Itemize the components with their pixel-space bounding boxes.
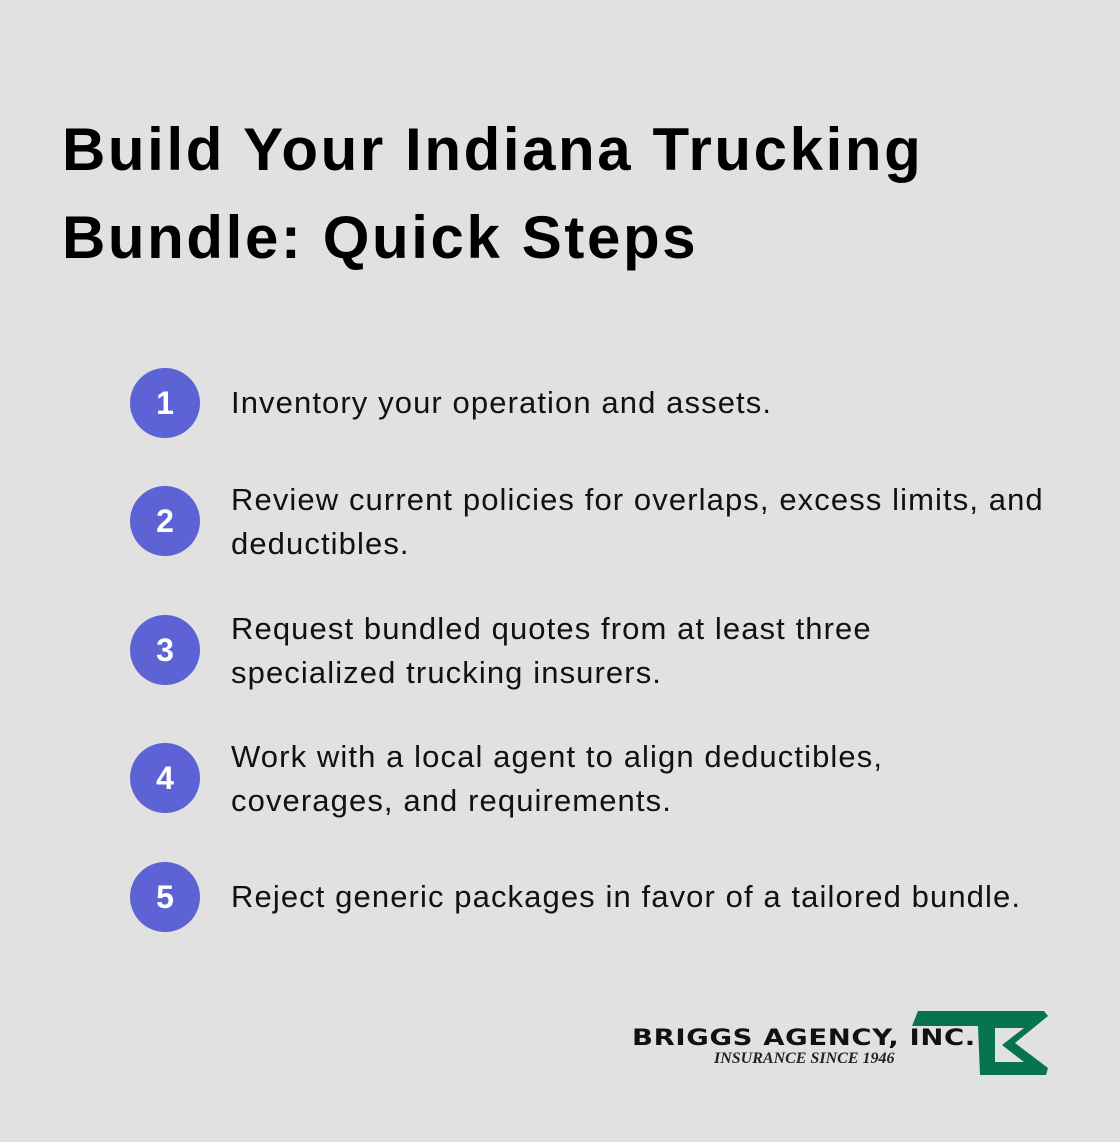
logo: [632, 1011, 1048, 1075]
step 4: [130, 739, 883, 818]
step 5: 5: [156, 879, 174, 915]
step 1: [130, 368, 772, 438]
step 5: [130, 862, 1021, 932]
step 2: [130, 482, 1044, 561]
step 1: 1: [156, 385, 174, 421]
step 3: 3: [156, 632, 174, 668]
title: Build Your Indiana Trucking: [62, 116, 923, 183]
step 3: [130, 611, 872, 690]
logo: INSURANCE SINCE 1946: [714, 1050, 894, 1067]
title: Bundle: Quick Steps: [62, 204, 698, 271]
title: [62, 116, 923, 271]
step 4: coverages, and requirements.: [231, 783, 672, 818]
step 4: 4: [156, 760, 174, 796]
step 1: Inventory your operation and assets.: [231, 385, 772, 420]
step 2: 2: [156, 503, 174, 539]
step 3: Request bundled quotes from at least three: [231, 611, 872, 646]
step 4: Work with a local agent to align deductibles,: [231, 739, 883, 774]
step 5: Reject generic packages in favor of a tailored bundle.: [231, 879, 1021, 914]
step 2: Review current policies for overlaps, excess limits, and: [231, 482, 1044, 517]
step 2: deductibles.: [231, 526, 410, 561]
step 3: specialized trucking insurers.: [231, 655, 662, 690]
logo: BRIGGS AGENCY, INC.: [632, 1026, 976, 1051]
